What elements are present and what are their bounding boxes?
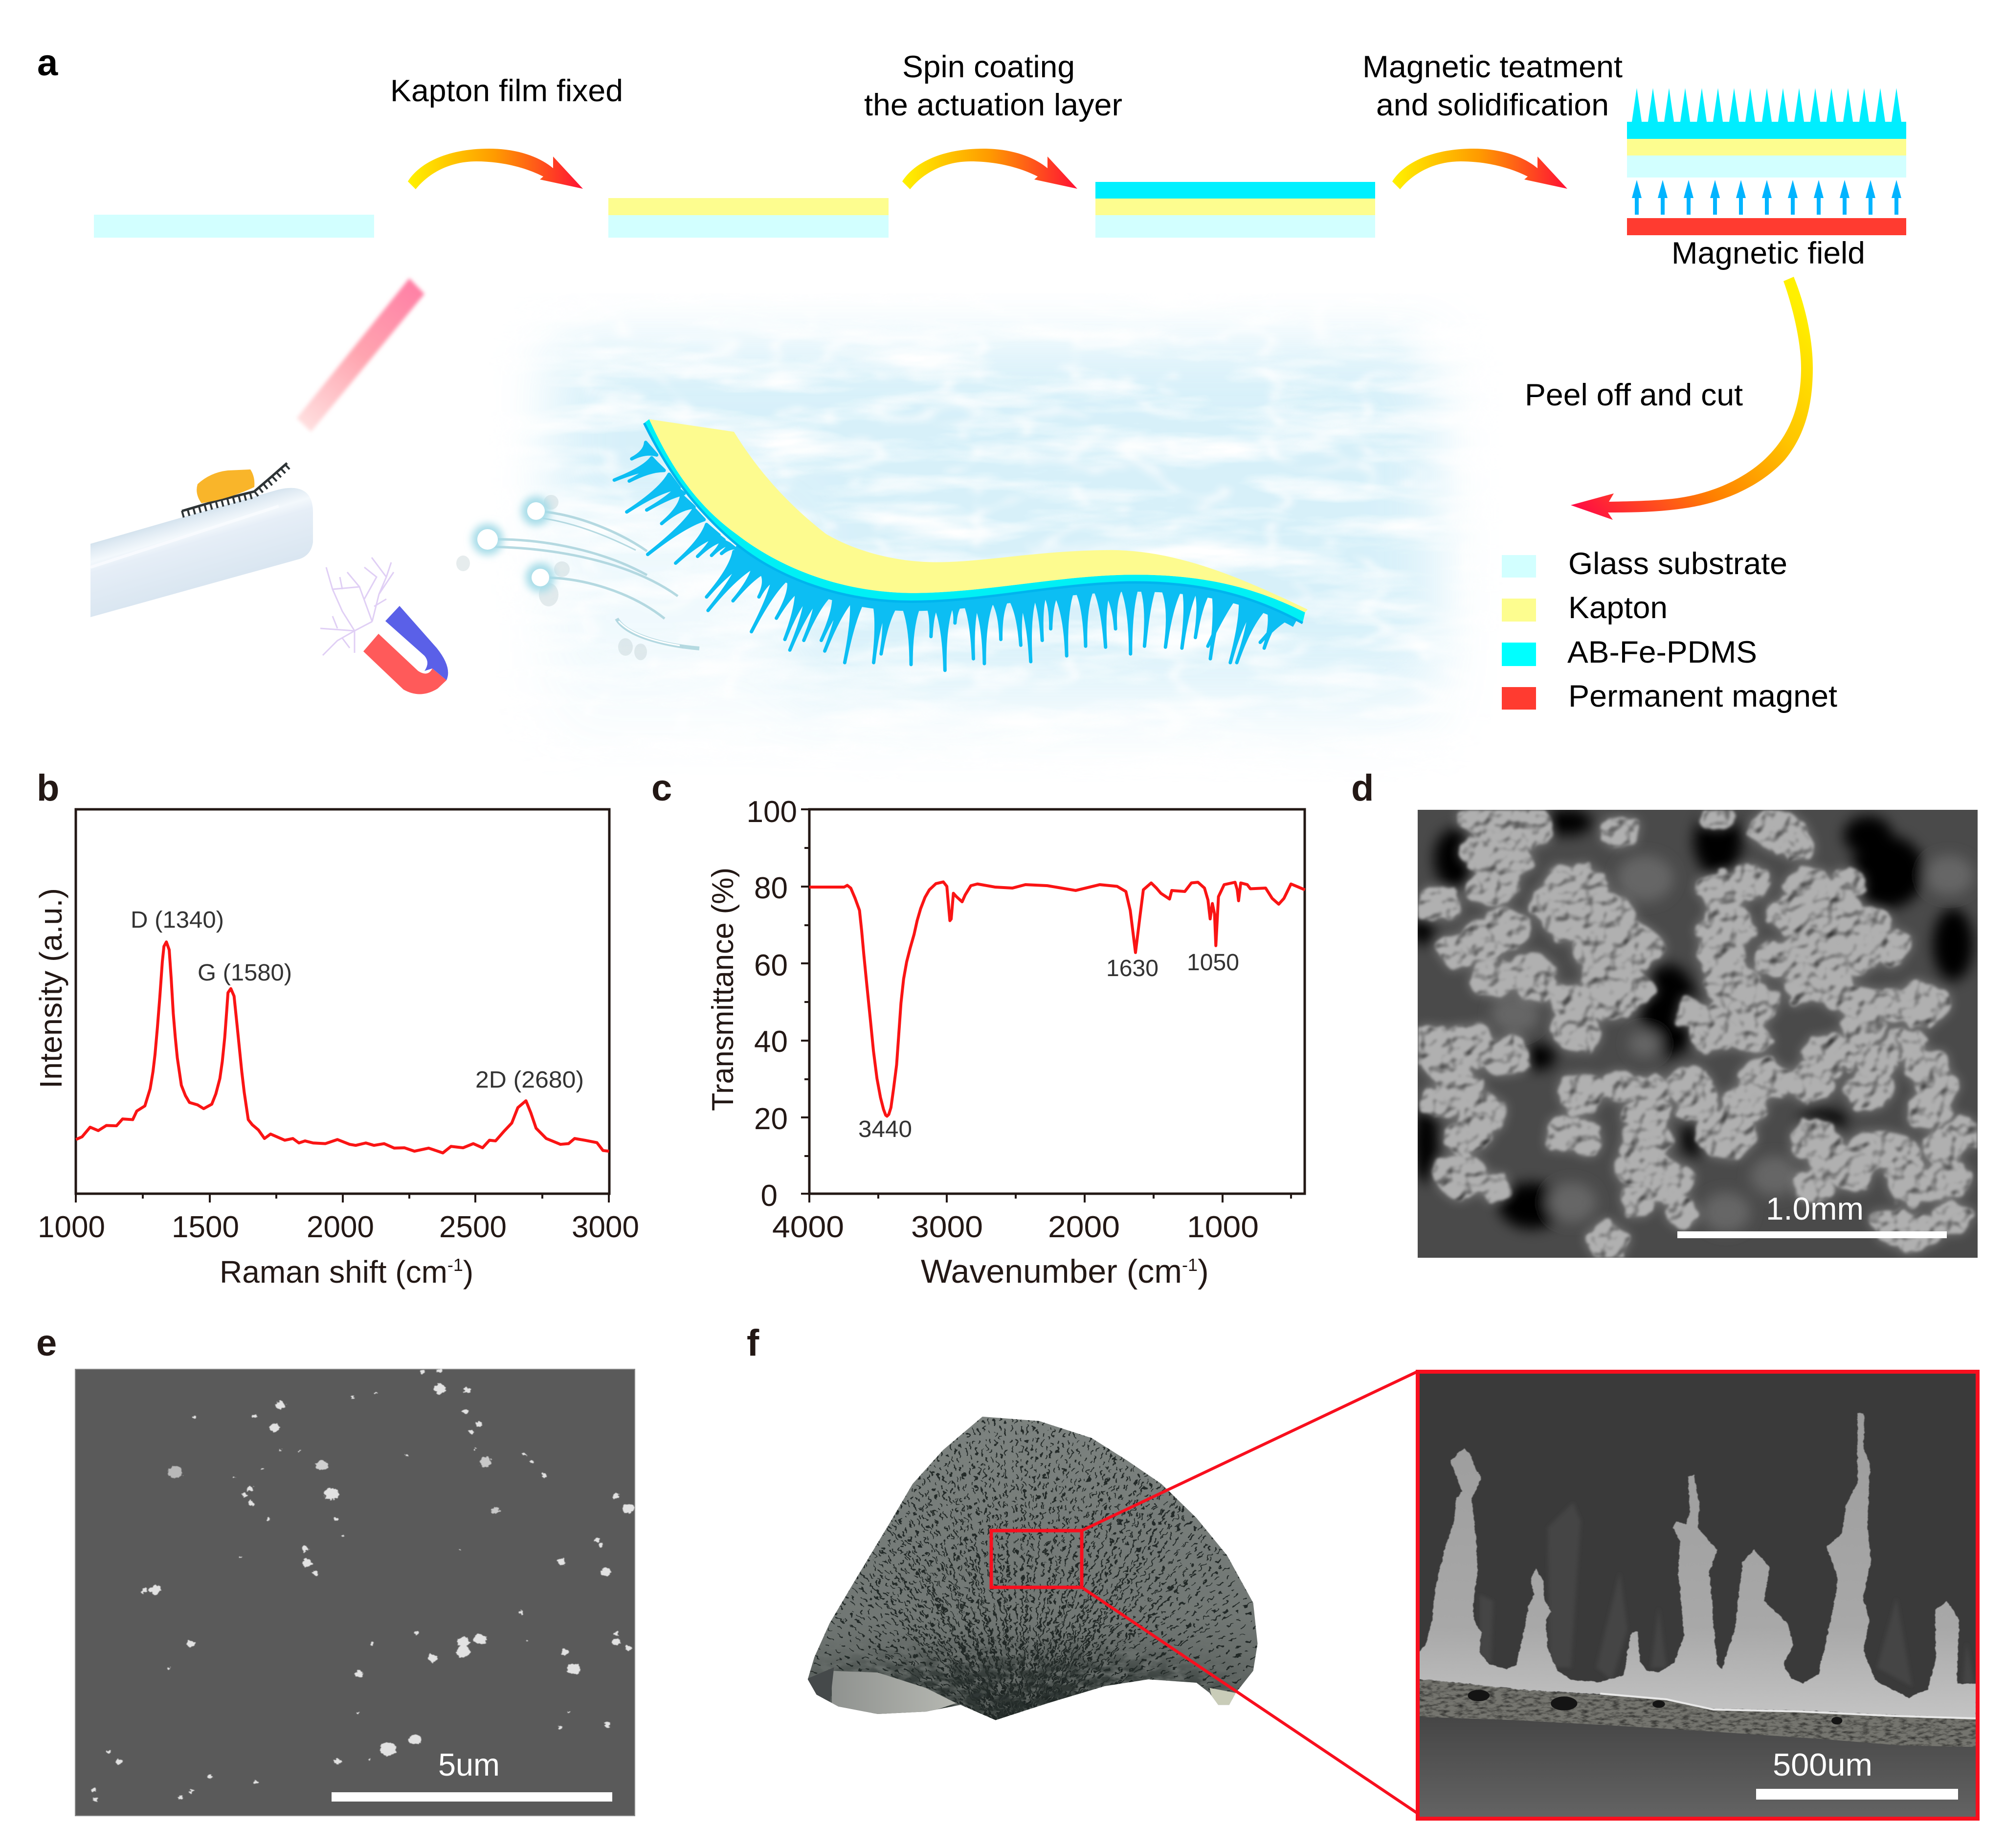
scale bar f: 500um xyxy=(1773,1747,1872,1782)
radial hair texture xyxy=(777,1406,1279,1758)
SEM image d xyxy=(1410,804,1980,1258)
zoom box and connector lines xyxy=(991,1371,1978,1819)
panel label b: b xyxy=(37,767,59,809)
orange block xyxy=(197,469,254,503)
legend xyxy=(1502,547,1838,713)
scale bar f xyxy=(1756,1747,1958,1800)
spike roots xyxy=(736,546,1295,623)
x axis tick labels: 1000 xyxy=(38,1210,105,1244)
x axis tick labels: 2000 xyxy=(307,1210,374,1244)
Raman curve xyxy=(76,942,609,1153)
floor xyxy=(1417,1715,1979,1820)
film sample on tube xyxy=(182,463,290,514)
y axis tick labels: 40 xyxy=(754,1025,788,1059)
spikes xyxy=(614,443,1290,670)
magnified SEM image xyxy=(1417,1372,1979,1820)
legend item: permanent magnet: Permanent magnet xyxy=(1568,679,1838,713)
x axis tick labels: 3000 xyxy=(911,1210,983,1244)
legend item: AB-Fe-PDMS: AB-Fe-PDMS xyxy=(1567,635,1757,669)
x axis title: -1 xyxy=(447,1255,463,1275)
bright edge of film xyxy=(1600,1693,1977,1718)
peak labels: 2D (2680) xyxy=(475,1067,584,1093)
panel f: photo of spiked film and magnified SEM xyxy=(747,1322,1979,1820)
glass wedge xyxy=(832,1671,956,1717)
spikes xyxy=(1417,1413,1977,1718)
scale bar d: 1.0mm xyxy=(1766,1191,1864,1226)
water swirls and bubbles xyxy=(456,495,699,660)
x axis tick labels xyxy=(772,1210,1259,1244)
y axis title: Intensity (a.u.) xyxy=(33,888,68,1089)
scale bar e: 5um xyxy=(438,1747,500,1782)
step 2: Kapton on glass xyxy=(608,198,889,238)
cyan actuation layer xyxy=(644,419,1305,623)
y axis tick labels: 0 xyxy=(761,1179,778,1213)
legend item: Kapton: Kapton xyxy=(1568,591,1668,625)
peak labels xyxy=(131,907,584,1093)
x axis tick labels: 4000 xyxy=(772,1210,844,1244)
lightning arcs xyxy=(320,557,394,655)
porous layer xyxy=(1417,1679,1979,1747)
horseshoe magnet xyxy=(363,606,448,694)
magnetic field arrows xyxy=(1632,180,1901,215)
peak labels: 3440 xyxy=(858,1116,912,1142)
label: spin coating the actuation layer xyxy=(864,50,1122,122)
peak labels: 1630 xyxy=(1106,956,1158,981)
panel a: fabrication process and actuation scene xyxy=(37,42,1906,782)
y axis title: Transmittance (%) xyxy=(706,868,740,1111)
arrow: magnetic treatment xyxy=(1392,149,1567,189)
y axis tick labels: 60 xyxy=(754,949,788,982)
x axis title: ) xyxy=(463,1254,473,1290)
panel label e: e xyxy=(36,1322,57,1364)
legend item: glass substrate: Glass substrate xyxy=(1568,547,1787,581)
y axis tick labels: 100 xyxy=(747,795,797,829)
scale bar e xyxy=(332,1747,612,1802)
label: Kapton film fixed: Kapton film fixed xyxy=(390,74,623,108)
label: spin coating the actuation layer: Spin coating xyxy=(902,50,1075,84)
dark corner xyxy=(805,1668,834,1707)
panel c: infrared spectrum xyxy=(651,767,1305,1290)
chart frame and ticks xyxy=(801,809,1305,1202)
pores xyxy=(1468,1690,1842,1724)
x axis tick labels xyxy=(38,1210,639,1244)
peak labels: D (1340) xyxy=(131,907,224,933)
x axis tick labels: 2500 xyxy=(439,1210,507,1244)
x axis title: ) xyxy=(1198,1253,1209,1290)
label: magnetic treatment and solidification xyxy=(1362,50,1623,122)
panel e: SEM of dispersed particles xyxy=(36,1322,635,1816)
glass tube xyxy=(90,488,313,617)
actuator ribbon with spikes xyxy=(614,419,1308,670)
peak labels: 1050 xyxy=(1187,950,1239,976)
x axis tick labels: 3000 xyxy=(572,1210,639,1244)
arrow: peel off and cut xyxy=(1571,277,1813,520)
y axis tick labels: 80 xyxy=(754,871,788,905)
label: spin coating the actuation layer: the actuation layer xyxy=(864,88,1122,122)
x axis title: Raman shift (cm xyxy=(220,1254,447,1290)
label: peel off and cut: Peel off and cut xyxy=(1525,378,1743,412)
x axis title: Wavenumber (cm xyxy=(921,1253,1182,1290)
bright specks xyxy=(92,1368,634,1802)
SEM image e xyxy=(75,1368,635,1816)
film photograph xyxy=(777,1406,1279,1758)
peak labels xyxy=(858,950,1239,1142)
label: magnetic treatment and solidification: and solidification xyxy=(1376,88,1609,122)
label: magnetic treatment and solidification: Magnetic teatment xyxy=(1362,50,1623,84)
legend item: Kapton xyxy=(1502,591,1668,625)
panel label f: f xyxy=(747,1322,759,1364)
peak labels: G (1580) xyxy=(198,960,292,986)
faint background spikes xyxy=(1479,1502,1975,1687)
step 3: three-layer stack xyxy=(1095,182,1375,238)
dark blotches near the lower edge xyxy=(808,1657,1227,1732)
x axis tick labels: 1500 xyxy=(172,1210,239,1244)
panel b: Raman spectrum xyxy=(33,767,639,1290)
panel d: SEM of particles xyxy=(1351,767,1980,1258)
chart frame and ticks xyxy=(76,809,609,1202)
cyan layer shadow edge xyxy=(644,423,1303,623)
scale bar d xyxy=(1677,1191,1947,1238)
panel label a: a xyxy=(37,42,58,84)
x axis title: -1 xyxy=(1182,1255,1198,1275)
panel label d: d xyxy=(1351,767,1374,809)
panel label c: c xyxy=(651,767,672,809)
label: magnetic field: Magnetic field xyxy=(1671,236,1865,270)
x axis tick labels: 2000 xyxy=(1048,1210,1120,1244)
step 1: glass substrate xyxy=(94,215,374,238)
light beam xyxy=(297,278,424,432)
y axis tick labels: 20 xyxy=(754,1102,788,1136)
step 4: stack with spikes in a magnetic field xyxy=(1627,88,1906,235)
y axis tick labels xyxy=(747,795,797,1213)
arrow: Kapton film fixed xyxy=(408,149,583,189)
water background xyxy=(529,318,1462,735)
FTIR curve xyxy=(809,882,1305,1116)
yellow Kapton layer xyxy=(649,419,1308,612)
arrow: spin coating xyxy=(902,149,1077,189)
x axis tick labels: 1000 xyxy=(1187,1210,1259,1244)
pale corner xyxy=(1209,1688,1236,1707)
